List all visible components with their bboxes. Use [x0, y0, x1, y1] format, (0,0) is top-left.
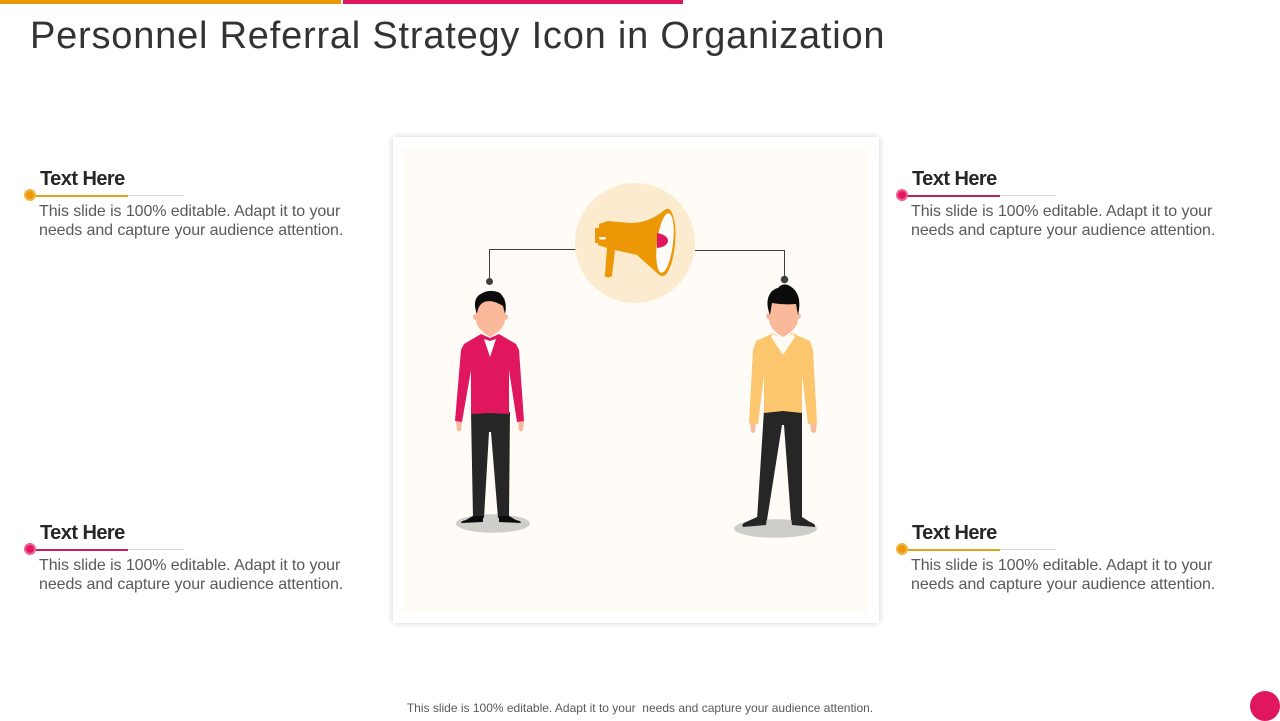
body text: needs and capture your audience attention. [911, 222, 1215, 239]
body text: This slide is 100% editable. Adapt it to your [39, 203, 340, 220]
page number badge [1250, 691, 1280, 721]
callout: top left [24, 168, 343, 239]
body text: needs and capture your audience attention. [39, 576, 343, 593]
connector: right [695, 250, 788, 283]
body text [39, 203, 343, 239]
shoes [461, 516, 483, 523]
heading: Text Here [40, 168, 125, 190]
hands [456, 421, 462, 432]
jacket [455, 334, 524, 422]
marker dot [896, 189, 908, 201]
heading: Text Here [912, 168, 997, 190]
shadow [734, 519, 817, 538]
title: Personnel Referral Strategy Icon in Organization [30, 15, 885, 57]
person: right, yellow jacket [734, 284, 817, 538]
body text: This slide is 100% editable. Adapt it to your [39, 557, 340, 574]
ears [473, 314, 479, 320]
top accent bar: orange [0, 0, 341, 4]
panel inner tint [403, 148, 869, 613]
body text: This slide is 100% editable. Adapt it to your [911, 203, 1212, 220]
hair [475, 291, 506, 314]
marker dot [24, 189, 36, 201]
panel: central illustration [393, 137, 879, 623]
body text [911, 203, 1215, 239]
hands [750, 421, 756, 433]
heading: Text Here [912, 522, 997, 544]
body text: needs and capture your audience attention. [911, 576, 1215, 593]
footer note: This slide is 100% editable. Adapt it to your needs and capture your audience attention. [407, 701, 873, 715]
body text: needs and capture your audience attention. [39, 222, 343, 239]
face [476, 298, 505, 337]
callout: top right [896, 168, 1215, 239]
callout: bottom right [896, 522, 1215, 593]
marker dot [896, 543, 908, 555]
shirt [484, 339, 496, 357]
heading: Text Here [40, 522, 125, 544]
jacket [749, 333, 817, 424]
body text: This slide is 100% editable. Adapt it to your [911, 557, 1212, 574]
hair [767, 284, 799, 315]
trousers [471, 412, 510, 518]
body text [39, 557, 343, 593]
connector: left [486, 250, 576, 285]
ears [766, 313, 772, 319]
shoes [742, 517, 767, 527]
shirt [771, 334, 795, 355]
face [769, 298, 798, 337]
top accent bar: pink [343, 0, 683, 4]
marker dot [24, 543, 36, 555]
icon: megaphone in circle [575, 183, 695, 303]
shadow [456, 514, 530, 533]
trousers [757, 410, 802, 520]
body text [911, 557, 1215, 593]
person: left, pink jacket [455, 291, 530, 533]
callout: bottom left [24, 522, 343, 593]
